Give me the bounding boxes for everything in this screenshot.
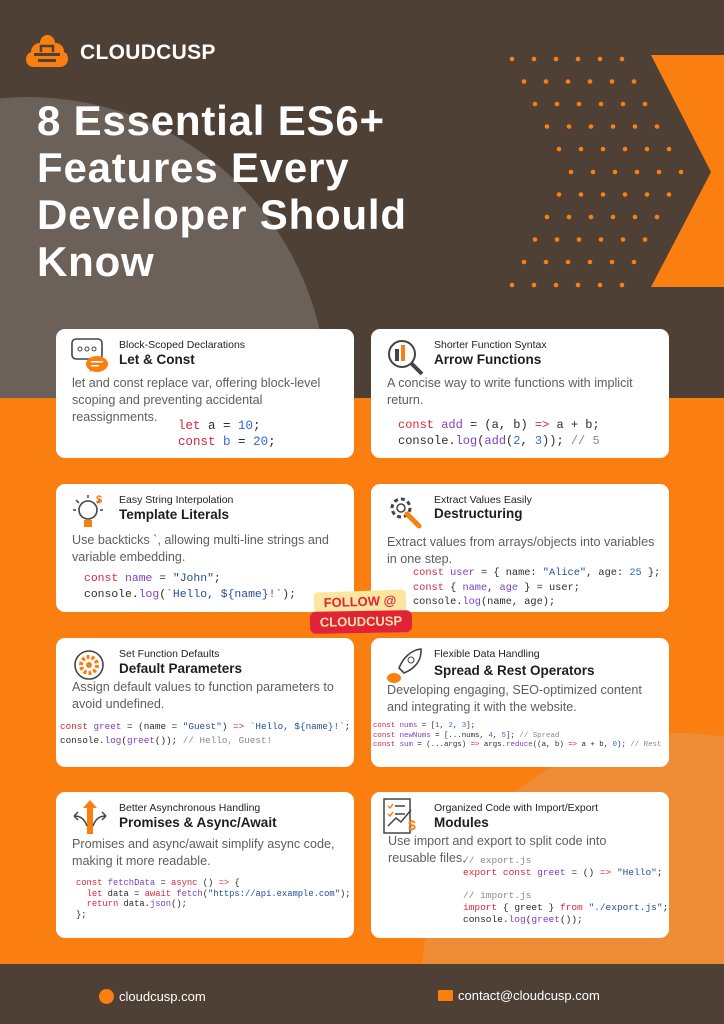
decorative dots and chevron bbox=[510, 55, 724, 288]
card: modules: Organized Code with Import/Export bbox=[434, 802, 598, 814]
follow badge: CLOUDCUSP bbox=[320, 613, 402, 630]
card: spread & rest: Developing engaging, SEO-optimized content and integrating it with the website. bbox=[387, 683, 642, 714]
card: arrow functions: Arrow Functions bbox=[434, 352, 541, 367]
card: promises: Promises and async/await simplify async code, making it more readable. bbox=[72, 837, 334, 868]
card: destructuring: Destructuring bbox=[434, 506, 523, 521]
card: modules: Use import and export to split code into reusable files. bbox=[388, 834, 606, 865]
card: let & const: let and const replace var, offering block-level scoping and preventing accidental reassignments. bbox=[72, 376, 320, 424]
title: Features Every bbox=[37, 144, 349, 191]
title bbox=[37, 97, 407, 285]
logo bbox=[26, 35, 216, 67]
card: destructuring: const user = { name: "Alice", age: 25 }; const { name, age } = user; console.log(name, age); bbox=[413, 567, 660, 608]
card: destructuring bbox=[371, 484, 669, 612]
card: default parameters: const greet = (name = "Guest") => `Hello, ${name}!`; console.log(greet()); // Hello, Guest! bbox=[60, 721, 350, 746]
card: promises: Better Asynchronous Handling bbox=[119, 802, 260, 814]
card: template literals: Use backticks `, allowing multi-line strings and variable embedding. bbox=[72, 533, 329, 564]
icon: rocket bbox=[387, 648, 422, 683]
card: let & const: Block-Scoped Declarations bbox=[119, 339, 245, 351]
title: Know bbox=[37, 238, 155, 285]
footer email: contact@cloudcusp.com bbox=[458, 988, 600, 1003]
card: arrow functions: A concise way to write functions with implicit return. bbox=[387, 376, 633, 407]
icon: gear wrench bbox=[390, 498, 422, 528]
icon: checklist: $ bbox=[408, 817, 416, 833]
card: promises: Promises & Async/Await bbox=[119, 815, 277, 830]
card: spread & rest bbox=[371, 638, 669, 767]
card: spread & rest: Spread & Rest Operators bbox=[434, 663, 595, 678]
card: let & const: let a = 10; const b = 20; bbox=[178, 419, 276, 449]
card: modules bbox=[371, 792, 669, 938]
icon: lightbulb: $ bbox=[96, 494, 102, 506]
icon: gear bbox=[74, 650, 104, 680]
card: template literals bbox=[56, 484, 354, 612]
footer website: cloudcusp.com bbox=[119, 989, 206, 1004]
card: template literals: const name = "John"; console.log(`Hello, ${name}!`); bbox=[84, 573, 296, 601]
logo: CLOUDCUSP bbox=[80, 41, 216, 64]
card: modules: // export.js export const greet = () => "Hello"; // import.js import { greet } from "./export.js"; console.log(greet()); bbox=[463, 855, 668, 925]
card: promises: const fetchData = async () => { let data = await fetch("https://api.example.com"); return data.json(); }; bbox=[76, 878, 351, 920]
card: let & const bbox=[56, 329, 354, 458]
card: template literals: Easy String Interpolation bbox=[119, 494, 233, 506]
card: default parameters: Set Function Defaults bbox=[119, 648, 219, 660]
title: Developer Should bbox=[37, 191, 407, 238]
background grey circle bbox=[0, 97, 327, 695]
icon: lightbulb bbox=[73, 494, 103, 527]
follow badge bbox=[310, 590, 412, 634]
card: promises bbox=[56, 792, 354, 938]
icon: chat bubbles bbox=[71, 338, 108, 372]
card: default parameters: Default Parameters bbox=[119, 661, 242, 676]
icon: arrows split bbox=[74, 800, 106, 834]
icon: magnifier chart bbox=[388, 340, 424, 376]
card: spread & rest: Flexible Data Handling bbox=[434, 648, 540, 660]
card: destructuring: Extract Values Easily bbox=[434, 494, 532, 506]
follow badge: FOLLOW @ bbox=[323, 593, 397, 610]
footer bbox=[0, 964, 724, 1024]
card: modules: Modules bbox=[434, 815, 489, 830]
card: spread & rest: const nums = [1, 2, 3]; const newNums = [...nums, 4, 5]; // Spread const sum = (...args) => args.reduce((a, b) => a + b, 0); // Rest bbox=[373, 722, 661, 749]
orange section bbox=[0, 398, 724, 964]
card: arrow functions: Shorter Function Syntax bbox=[434, 339, 547, 351]
card: default parameters: Assign default values to function parameters to avoid undefined. bbox=[72, 680, 334, 711]
card: default parameters bbox=[56, 638, 354, 767]
icon: checklist bbox=[383, 798, 416, 834]
card: arrow functions: const add = (a, b) => a + b; console.log(add(2, 3)); // 5 bbox=[398, 418, 600, 448]
card: destructuring: Extract values from arrays/objects into variables in one step. bbox=[387, 535, 654, 566]
card: arrow functions bbox=[371, 329, 669, 458]
card: let & const: Let & Const bbox=[119, 352, 195, 367]
card: template literals: Template Literals bbox=[119, 507, 229, 522]
title: 8 Essential ES6+ bbox=[37, 97, 385, 144]
